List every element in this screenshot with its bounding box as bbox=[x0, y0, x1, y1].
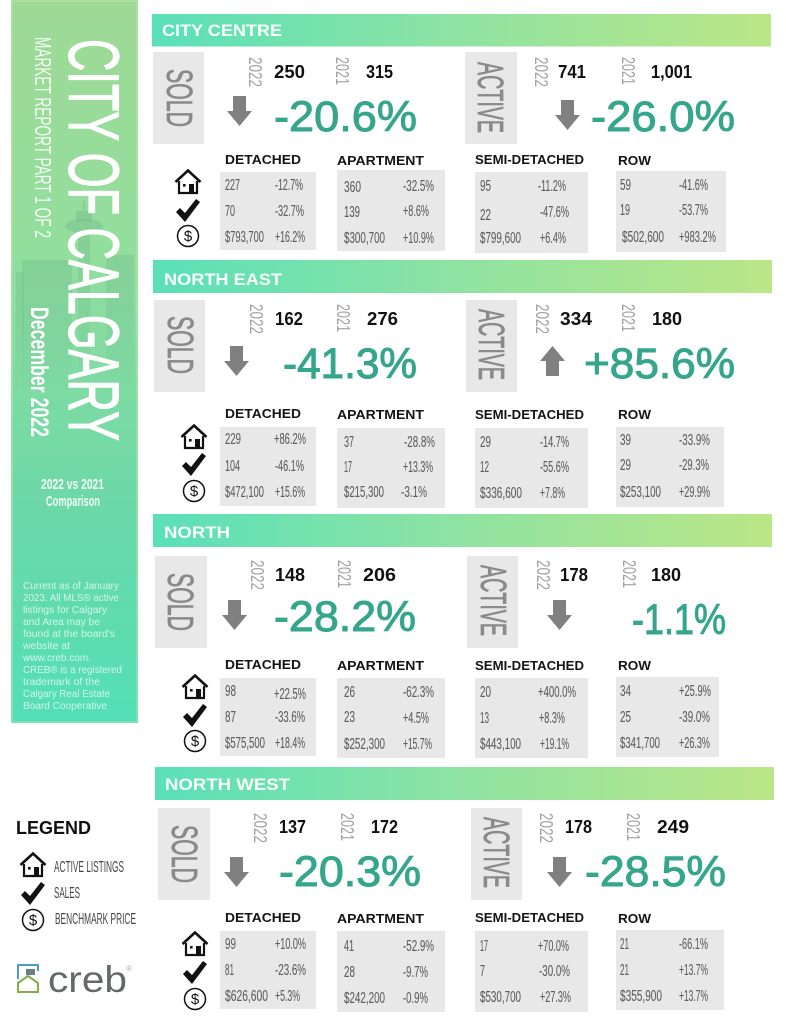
disclaimer text bbox=[22, 581, 122, 712]
apartment table: $215,300 bbox=[344, 484, 384, 501]
disclaimer text: Current as of January bbox=[23, 581, 119, 592]
detached table: $472,100 bbox=[225, 484, 264, 501]
arrow: down bbox=[227, 96, 252, 126]
active years: 1,001 bbox=[651, 62, 692, 82]
disclaimer text: trademark of the bbox=[23, 677, 100, 688]
apartment table: 23 bbox=[344, 709, 355, 726]
legend: sales: SALES bbox=[54, 885, 80, 902]
icons: $ bbox=[191, 991, 200, 1008]
active label: ACTIVE bbox=[473, 565, 514, 636]
detached table: -23.6% bbox=[275, 962, 306, 979]
apartment table: +10.9% bbox=[403, 230, 434, 247]
icon: dollar: $ bbox=[29, 912, 38, 929]
detached table: DETACHED bbox=[225, 406, 301, 421]
apartment table: -9.7% bbox=[403, 964, 428, 981]
icons bbox=[176, 170, 200, 246]
semi-detached table bbox=[475, 910, 588, 1012]
detached table: -33.6% bbox=[275, 709, 305, 726]
arrow: up bbox=[540, 346, 565, 376]
row table: 59 bbox=[620, 177, 631, 194]
sold years: 2021 bbox=[332, 57, 352, 85]
active years bbox=[536, 813, 689, 843]
icon: check bbox=[21, 882, 45, 905]
apartment table: -3.1% bbox=[401, 484, 427, 501]
detached table: 70 bbox=[225, 203, 235, 220]
row table: -41.6% bbox=[679, 177, 708, 194]
apartment table: -28.8% bbox=[404, 434, 435, 451]
panel: sidebar bbox=[11, 0, 138, 723]
active years: 2021 bbox=[623, 813, 643, 841]
semi-detached table: SEMI-DETACHED bbox=[475, 658, 584, 673]
active label bbox=[465, 52, 517, 144]
active years: 2022 bbox=[536, 813, 556, 843]
active years: 2022 bbox=[532, 304, 552, 334]
icon: house bbox=[20, 854, 46, 876]
detached table: 98 bbox=[225, 683, 236, 700]
active label: ACTIVE bbox=[470, 62, 511, 133]
logo: creb: creb bbox=[48, 959, 127, 1000]
apartment table: 37 bbox=[344, 434, 354, 451]
apartment table: $300,700 bbox=[344, 230, 385, 247]
sold years: 148 bbox=[275, 565, 305, 585]
sold label: SOLD bbox=[160, 316, 201, 374]
row table: ROW bbox=[618, 153, 652, 168]
detached table: +5.3% bbox=[275, 988, 300, 1005]
row table: ROW bbox=[618, 911, 652, 926]
detached table: -32.7% bbox=[275, 203, 304, 220]
sold label: SOLD bbox=[160, 573, 201, 631]
skyline silhouette bbox=[16, 201, 134, 390]
logo: creb: ® bbox=[126, 964, 132, 973]
row table: 21 bbox=[620, 962, 629, 979]
comparison note: Comparison bbox=[46, 493, 100, 510]
active label bbox=[467, 556, 518, 648]
sold years: 2021 bbox=[337, 813, 357, 841]
detached table: 104 bbox=[225, 458, 240, 475]
section: City Centre bbox=[152, 14, 771, 253]
semi-detached table: -11.2% bbox=[538, 178, 566, 195]
detached table bbox=[220, 406, 316, 506]
active label: ACTIVE bbox=[476, 817, 517, 888]
apartment table: +4.5% bbox=[403, 710, 429, 727]
section: North West bbox=[155, 767, 774, 1012]
disclaimer text: website at bbox=[22, 641, 70, 652]
arrow: down bbox=[224, 857, 249, 887]
apartment table: 17 bbox=[344, 459, 352, 476]
semi-detached table: -47.6% bbox=[540, 204, 569, 221]
active years bbox=[532, 304, 682, 334]
row table: ROW bbox=[618, 407, 652, 422]
comparison note bbox=[41, 476, 104, 510]
detached table: +10.0% bbox=[275, 936, 306, 953]
sold years: 2022 bbox=[250, 813, 270, 843]
detached table bbox=[220, 152, 316, 250]
semi-detached table: +6.4% bbox=[540, 230, 566, 247]
logo: creb bbox=[18, 959, 132, 1000]
apartment table: APARTMENT bbox=[337, 153, 424, 168]
apartment table: 26 bbox=[344, 684, 355, 701]
sold years: 137 bbox=[279, 817, 306, 837]
sold years: 2021 bbox=[334, 560, 354, 588]
semi-detached table: 7 bbox=[480, 963, 485, 980]
sold years bbox=[250, 813, 398, 843]
panel: legend bbox=[16, 818, 136, 930]
sold change: -20.3% bbox=[279, 848, 421, 896]
row table: 39 bbox=[620, 432, 631, 449]
semi-detached table: 17 bbox=[480, 938, 488, 955]
sold years: 2022 bbox=[247, 560, 267, 590]
sold label: SOLD bbox=[159, 69, 200, 127]
row table: -33.9% bbox=[679, 432, 710, 449]
row table: ROW bbox=[618, 658, 652, 673]
apartment table: +13.3% bbox=[403, 459, 433, 476]
section title: NORTH EAST bbox=[164, 270, 283, 289]
detached table: +86.2% bbox=[274, 431, 306, 448]
detached table bbox=[220, 910, 316, 1009]
active years: 2022 bbox=[531, 57, 551, 87]
sold change: -41.3% bbox=[283, 340, 417, 388]
detached table: 229 bbox=[225, 431, 241, 448]
sold years bbox=[245, 57, 393, 87]
semi-detached table: 95 bbox=[480, 178, 491, 195]
apartment table bbox=[337, 658, 445, 758]
detached table: +18.4% bbox=[275, 735, 305, 752]
apartment table: +8.6% bbox=[403, 203, 429, 220]
detached table: 87 bbox=[225, 709, 236, 726]
disclaimer text: 2023. All MLS® active bbox=[23, 593, 119, 604]
row table: +13.7% bbox=[679, 988, 708, 1005]
disclaimer text: Board Cooperative bbox=[23, 701, 107, 712]
sold years: 172 bbox=[371, 817, 398, 837]
semi-detached table: -30.0% bbox=[539, 963, 570, 980]
apartment table bbox=[337, 911, 445, 1012]
sold years: 2022 bbox=[246, 304, 266, 334]
semi-detached table: SEMI-DETACHED bbox=[475, 407, 584, 422]
semi-detached table: $530,700 bbox=[480, 989, 521, 1006]
arrow: down bbox=[555, 100, 580, 130]
semi-detached table: +400.0% bbox=[538, 684, 576, 701]
active years: 2022 bbox=[533, 560, 553, 590]
icons: $ bbox=[190, 483, 199, 500]
detached table: +15.6% bbox=[275, 484, 305, 501]
sidebar date: December 2022 bbox=[25, 307, 53, 437]
apartment table bbox=[337, 407, 445, 508]
detached table: +22.5% bbox=[274, 686, 306, 703]
row table: +13.7% bbox=[679, 962, 708, 979]
icons: $ bbox=[191, 733, 200, 750]
detached table: DETACHED bbox=[225, 657, 301, 672]
arrow: down bbox=[547, 600, 572, 630]
sold label bbox=[153, 52, 204, 144]
active change: -28.5% bbox=[585, 848, 726, 896]
row table: $253,100 bbox=[620, 484, 661, 501]
detached table: DETACHED bbox=[225, 910, 301, 925]
semi-detached table: +7.8% bbox=[540, 485, 565, 502]
header bar bbox=[153, 514, 772, 547]
active years: 741 bbox=[558, 62, 586, 82]
semi-detached table: $336,600 bbox=[480, 485, 522, 502]
apartment table: -32.5% bbox=[403, 178, 434, 195]
row table bbox=[616, 658, 719, 757]
arrow: down bbox=[547, 857, 572, 887]
semi-detached table: +70.0% bbox=[538, 938, 569, 955]
sidebar subtitle: MARKET REPORT PART 1 OF 2 bbox=[30, 37, 56, 238]
detached table bbox=[220, 657, 316, 756]
sold label: SOLD bbox=[164, 825, 205, 883]
sold label bbox=[158, 808, 210, 900]
active years bbox=[533, 560, 681, 590]
disclaimer text: listings for Calgary bbox=[23, 605, 107, 616]
sold label bbox=[154, 300, 205, 392]
row table: $502,600 bbox=[622, 229, 664, 246]
sold change: -28.2% bbox=[274, 593, 416, 641]
sold years: 206 bbox=[363, 565, 396, 585]
semi-detached table: +19.1% bbox=[540, 736, 569, 753]
row table: -29.3% bbox=[679, 457, 709, 474]
row table: +26.3% bbox=[679, 735, 710, 752]
sold label bbox=[155, 556, 207, 648]
disclaimer text: Calgary Real Estate bbox=[23, 689, 110, 700]
detached table: -46.1% bbox=[275, 458, 304, 475]
section title: NORTH bbox=[164, 523, 230, 542]
row table bbox=[616, 153, 726, 252]
apartment table: $242,200 bbox=[344, 990, 385, 1007]
semi-detached table: $443,100 bbox=[480, 736, 521, 753]
row table: -53.7% bbox=[679, 202, 708, 219]
semi-detached table: SEMI-DETACHED bbox=[475, 910, 584, 925]
apartment table: APARTMENT bbox=[337, 407, 424, 422]
icons: $ bbox=[184, 228, 193, 245]
sold years: 162 bbox=[275, 309, 303, 329]
row table: +29.9% bbox=[679, 484, 710, 501]
row table: -39.0% bbox=[679, 709, 710, 726]
disclaimer text: found at the board's bbox=[23, 629, 115, 640]
active change: -1.1% bbox=[632, 596, 726, 644]
active label bbox=[466, 300, 517, 392]
apartment table: +15.7% bbox=[403, 736, 432, 753]
semi-detached table: 22 bbox=[480, 207, 491, 224]
active years bbox=[531, 57, 692, 87]
disclaimer text: CREB® is a registered bbox=[23, 665, 122, 676]
active years: 180 bbox=[651, 565, 681, 585]
header bar bbox=[153, 260, 772, 293]
active years: 2021 bbox=[619, 560, 639, 588]
apartment table: 360 bbox=[344, 179, 361, 196]
apartment table: 28 bbox=[344, 964, 355, 981]
semi-detached table: 20 bbox=[480, 684, 491, 701]
active years: 178 bbox=[560, 565, 588, 585]
semi-detached table: 12 bbox=[480, 459, 489, 476]
sold years: 250 bbox=[274, 62, 305, 82]
row table bbox=[616, 407, 724, 507]
row table: $355,900 bbox=[620, 988, 662, 1005]
legend title: LEGEND bbox=[16, 818, 91, 838]
header bar bbox=[152, 14, 771, 46]
detached table: -12.7% bbox=[275, 177, 303, 194]
apartment table: 41 bbox=[344, 938, 354, 955]
arrow: down bbox=[224, 346, 249, 376]
icons bbox=[182, 932, 208, 1010]
active years: 334 bbox=[560, 309, 592, 329]
header bar bbox=[155, 767, 774, 800]
section: North East bbox=[153, 260, 772, 508]
apartment table: -52.9% bbox=[403, 938, 434, 955]
semi-detached table: -55.6% bbox=[540, 459, 569, 476]
icons bbox=[182, 426, 206, 502]
apartment table bbox=[337, 153, 445, 251]
row table: $341,700 bbox=[620, 735, 660, 752]
semi-detached table bbox=[475, 407, 588, 508]
detached table: 99 bbox=[225, 936, 236, 953]
section: North bbox=[153, 514, 772, 758]
row table: 19 bbox=[620, 202, 630, 219]
row table: -66.1% bbox=[679, 936, 708, 953]
detached table: 81 bbox=[225, 962, 234, 979]
active change: +85.6% bbox=[584, 340, 735, 388]
row table: +983.2% bbox=[679, 229, 716, 246]
active years: 180 bbox=[652, 309, 682, 329]
legend: benchmark price: BENCHMARK PRICE bbox=[55, 911, 136, 928]
apartment table: $252,300 bbox=[344, 736, 385, 753]
sold change: -20.6% bbox=[274, 93, 417, 141]
row table: +25.9% bbox=[679, 683, 711, 700]
sold years: 276 bbox=[367, 309, 398, 329]
legend: active listings: ACTIVE LISTINGS bbox=[54, 859, 124, 876]
detached table: $793,700 bbox=[225, 229, 264, 246]
detached table: $575,500 bbox=[225, 735, 265, 752]
detached table: 227 bbox=[225, 177, 240, 194]
comparison note: 2022 vs 2021 bbox=[41, 476, 104, 493]
apartment table: APARTMENT bbox=[337, 658, 424, 673]
row table: 21 bbox=[620, 936, 629, 953]
semi-detached table: $799,600 bbox=[480, 230, 521, 247]
apartment table: 139 bbox=[344, 204, 360, 221]
active years: 2021 bbox=[618, 57, 638, 85]
detached table: +16.2% bbox=[275, 229, 305, 246]
apartment table: -62.3% bbox=[403, 684, 434, 701]
active label: ACTIVE bbox=[471, 309, 512, 380]
semi-detached table bbox=[475, 658, 588, 758]
sold years: 2021 bbox=[333, 304, 353, 332]
row table: 34 bbox=[620, 683, 631, 700]
sidebar title: CITY OF CALGARY bbox=[53, 39, 132, 441]
arrow: down bbox=[222, 600, 247, 630]
semi-detached table bbox=[475, 152, 588, 253]
active change: -26.0% bbox=[591, 93, 735, 141]
row table: 29 bbox=[620, 457, 631, 474]
apartment table: APARTMENT bbox=[337, 911, 424, 926]
detached table: DETACHED bbox=[225, 152, 301, 167]
apartment table: -0.9% bbox=[403, 990, 428, 1007]
section title: CITY CENTRE bbox=[162, 21, 282, 40]
active years: 249 bbox=[657, 817, 689, 837]
disclaimer text: www.creb.com. bbox=[22, 653, 91, 664]
semi-detached table: SEMI-DETACHED bbox=[475, 152, 584, 167]
sold years bbox=[247, 560, 396, 590]
active years: 2021 bbox=[618, 304, 638, 332]
semi-detached table: -14.7% bbox=[540, 434, 569, 451]
semi-detached table: 29 bbox=[480, 434, 491, 451]
sold years: 315 bbox=[366, 62, 393, 82]
row table: 25 bbox=[620, 709, 631, 726]
semi-detached table: +27.3% bbox=[540, 989, 571, 1006]
semi-detached table: 13 bbox=[480, 710, 489, 727]
disclaimer text: and Area may be bbox=[23, 617, 100, 628]
sold years: 2022 bbox=[245, 57, 265, 87]
section title: NORTH WEST bbox=[165, 775, 291, 794]
active years: 178 bbox=[565, 817, 592, 837]
semi-detached table: +8.3% bbox=[539, 710, 565, 727]
icons bbox=[182, 676, 208, 752]
active label bbox=[471, 808, 522, 900]
detached table: $626,600 bbox=[225, 988, 268, 1005]
sold years bbox=[246, 304, 398, 334]
row table bbox=[616, 911, 724, 1010]
